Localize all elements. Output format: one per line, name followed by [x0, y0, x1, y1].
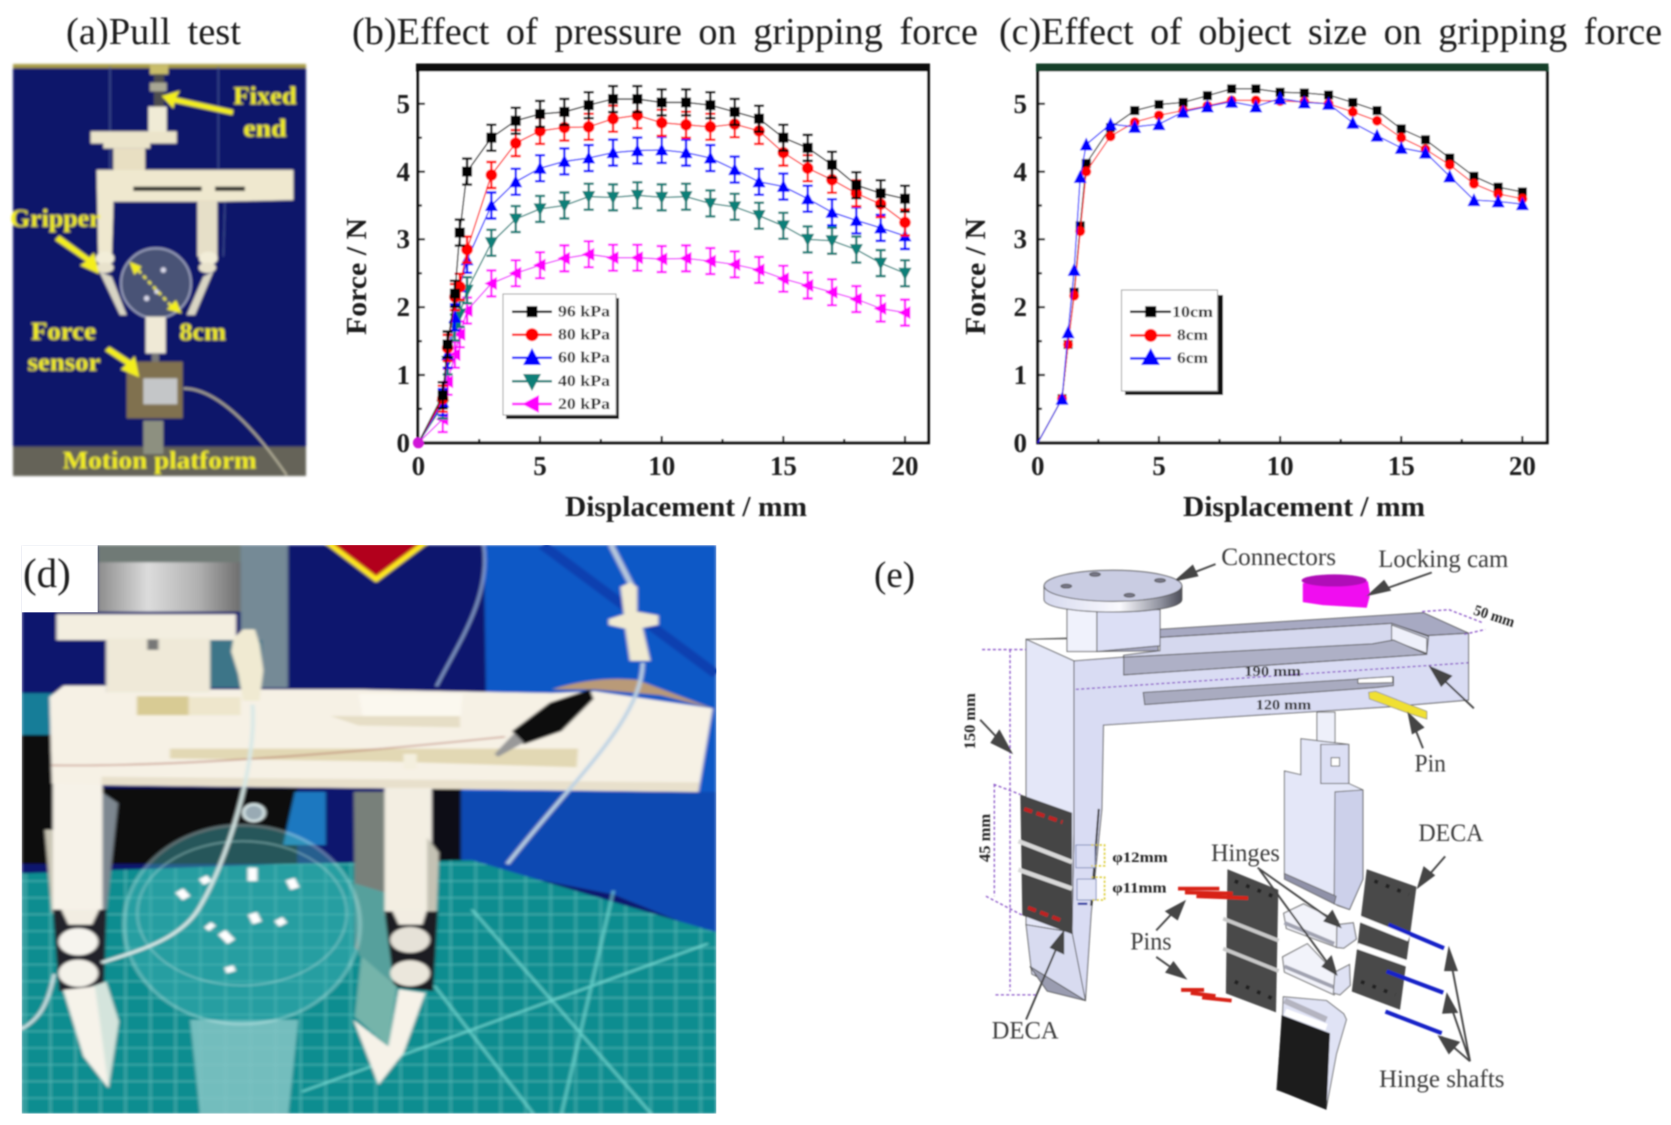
chart b y tick labels: 1 — [396, 360, 410, 390]
panel e labels: 120 mm — [1256, 697, 1312, 713]
chart b x tick labels: 20 — [892, 451, 918, 481]
top fixture — [91, 65, 177, 172]
chart c x tick labels: 10 — [1267, 451, 1294, 481]
chart b legend: 80 kPa — [558, 326, 610, 344]
panel e labels — [962, 544, 1517, 1093]
chart c y tick labels: 1 — [1014, 360, 1027, 390]
red warning triangle — [328, 543, 425, 579]
chart c frame — [1036, 64, 1548, 443]
cutting mat — [22, 860, 716, 1114]
panel e: gripper CAD exploded view — [962, 544, 1517, 1110]
chart c: effect of object size — [961, 64, 1548, 523]
title: panel b: (b)Effect of pressure on gripping force — [352, 11, 978, 53]
chart c y tick labels: 4 — [1014, 157, 1027, 187]
chart b origin marker — [413, 437, 424, 448]
panel e labels: φ12mm — [1112, 849, 1168, 866]
DECA sheet on frame — [1018, 795, 1099, 934]
chart c y tick labels: 0 — [1014, 428, 1027, 458]
leader arrows — [980, 564, 1474, 1061]
dimension lines — [982, 610, 1485, 995]
hinge detail — [1076, 845, 1105, 904]
panel e labels: Hinges — [1211, 840, 1280, 867]
chart b y axis title: Force / N — [342, 218, 373, 335]
panel d: gripper holding ball photo — [0, 530, 716, 1114]
panel e letter: (e) — [874, 555, 915, 596]
chart c y tick labels: 2 — [1014, 292, 1027, 322]
panel e labels: Connectors — [1221, 544, 1336, 571]
chart c x tick labels: 20 — [1509, 451, 1536, 481]
mounting plate and stem — [57, 614, 236, 693]
main frame — [1026, 613, 1469, 1001]
yellow labels: Motion platform — [63, 447, 257, 474]
yellow labels: end — [243, 116, 287, 143]
tube connectors — [231, 582, 658, 701]
title: panel c: (c)Effect of object size on gripping force — [999, 11, 1662, 53]
yellow labels: Fixed — [233, 83, 297, 110]
chart b legend: 20 kPa — [558, 396, 610, 413]
chart c legend: 6cm — [1177, 350, 1208, 367]
panel e labels: DECA — [1418, 820, 1483, 847]
panel e labels: Pin — [1415, 750, 1446, 777]
gripper body — [96, 170, 293, 315]
chart c x tick labels: 5 — [1152, 451, 1166, 481]
connector disc and neck — [1044, 570, 1182, 651]
steel cylinder — [98, 545, 288, 687]
red pins — [1178, 889, 1248, 1001]
chart b y tick labels: 4 — [396, 157, 410, 187]
pin — [1369, 691, 1427, 719]
panel d letter: (d) — [23, 550, 71, 596]
blue hinge shafts — [1385, 925, 1444, 1033]
yellow labels: Force — [31, 318, 96, 345]
chart c legend — [1122, 290, 1223, 395]
chart b x axis title: Displacement / mm — [565, 492, 807, 523]
transparent ball — [124, 804, 360, 1024]
panel e labels: 190 mm — [1244, 663, 1301, 680]
chart b x tick labels: 10 — [648, 451, 675, 481]
panel e labels: φ11mm — [1112, 879, 1167, 896]
chart c y axis title: Force / N — [961, 218, 992, 335]
chart b legend — [503, 294, 619, 419]
panel a: pull test photo — [10, 64, 306, 476]
chart b x tick labels: 15 — [770, 451, 797, 481]
hinges parts — [1283, 904, 1356, 995]
panel e labels: Pins — [1130, 928, 1172, 955]
chart b y tick labels — [396, 89, 410, 458]
transparent cup — [190, 1020, 298, 1113]
chart c x tick labels: 15 — [1388, 451, 1415, 481]
chart c x tick labels — [1031, 451, 1536, 481]
yellow labels — [10, 83, 297, 474]
force sensor — [127, 317, 287, 475]
chart b series — [418, 99, 905, 443]
panel e labels: 150 mm — [962, 693, 979, 749]
yellow labels: 8cm — [179, 319, 226, 346]
panel e labels: Hinge shafts — [1379, 1066, 1504, 1093]
left gripper finger — [45, 780, 119, 1088]
chart b: effect of pressure — [342, 64, 930, 523]
chart c x axis title: Displacement / mm — [1183, 492, 1425, 523]
exploded finger part — [1284, 712, 1363, 910]
chart c y tick labels: 5 — [1014, 89, 1027, 119]
finger tip part — [1277, 997, 1346, 1110]
locking cam — [1302, 574, 1370, 608]
panel e labels: Locking cam — [1378, 546, 1509, 573]
right gripper finger — [353, 788, 439, 1085]
chart b x tick labels: 5 — [533, 451, 547, 481]
panel e labels: DECA — [992, 1018, 1059, 1045]
middle DECA sheet — [1223, 869, 1279, 1012]
yellow arrows — [55, 91, 233, 377]
object ball — [121, 248, 191, 318]
chart b x tick labels — [412, 451, 918, 481]
chart b legend: 60 kPa — [558, 350, 610, 366]
right DECA sheet — [1352, 869, 1416, 1010]
chart b y tick labels: 5 — [396, 89, 410, 119]
yellow labels: sensor — [28, 350, 100, 377]
main gripper body — [50, 679, 713, 792]
chart c y tick labels — [1014, 89, 1027, 458]
chart b y tick labels: 2 — [396, 292, 410, 322]
chart c y tick labels: 3 — [1014, 224, 1027, 254]
alligator clip — [495, 689, 594, 757]
yellow labels: Gripper — [10, 206, 101, 233]
chart b frame — [416, 64, 930, 443]
chart b y tick labels: 3 — [396, 224, 410, 254]
chart c legend: 8cm — [1177, 327, 1208, 344]
chart c legend: 10cm — [1172, 304, 1213, 321]
title: panel a: (a)Pull test — [66, 11, 241, 53]
panel e labels: 45 mm — [977, 814, 994, 862]
air tubes — [22, 545, 643, 1029]
white corner of panel d — [22, 545, 98, 612]
chart c series — [1038, 89, 1522, 443]
chart b legend: 40 kPa — [558, 373, 610, 390]
panel e labels: 50 mm — [1471, 602, 1517, 631]
chart c x tick labels: 0 — [1031, 451, 1045, 481]
chart b legend: 96 kPa — [558, 304, 610, 320]
chart b y tick labels: 0 — [396, 428, 410, 458]
chart b x tick labels: 0 — [412, 451, 425, 481]
